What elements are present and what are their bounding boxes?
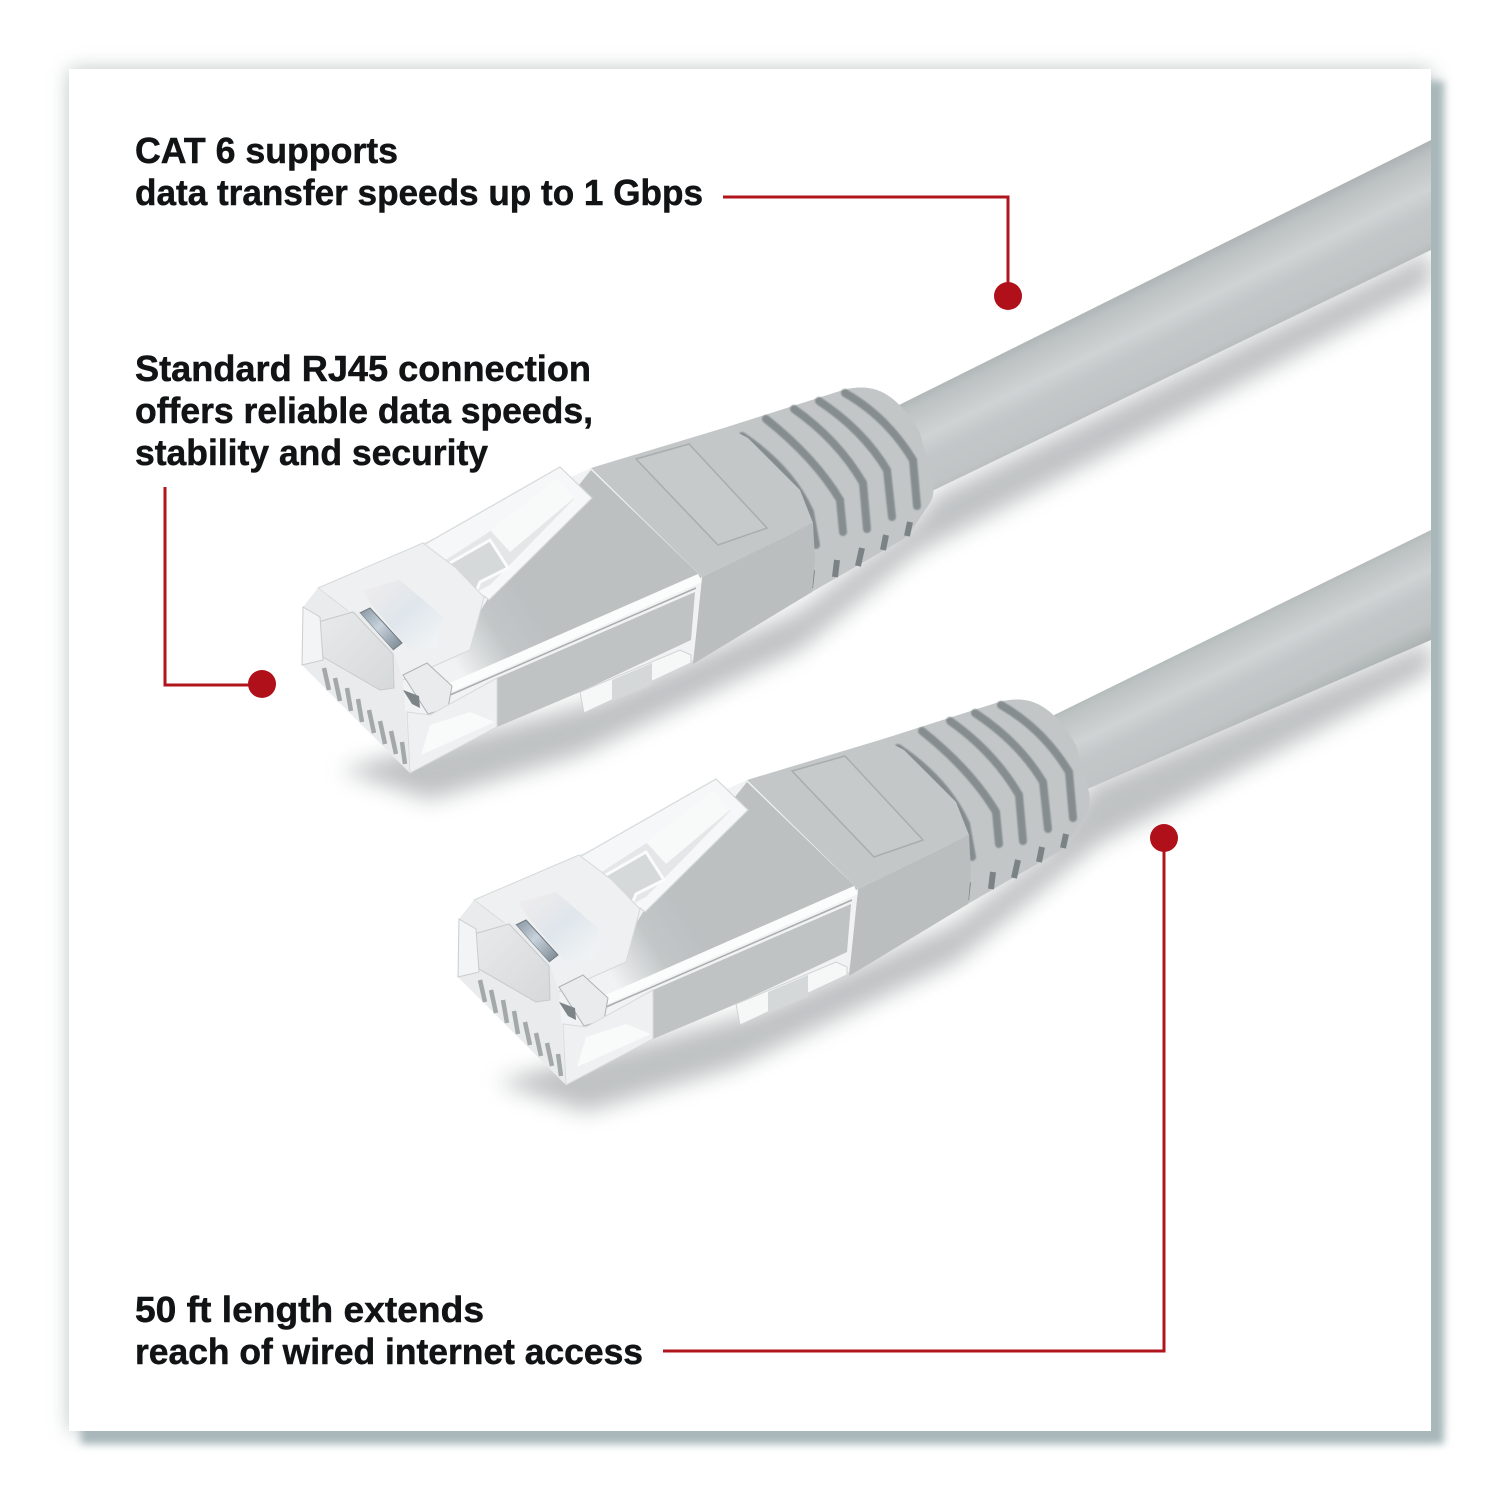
leader line <box>723 197 1008 296</box>
callout text: 50 ft length extends <box>135 1289 484 1330</box>
product photo: gray ethernet cable pair <box>302 140 1431 1112</box>
callout text <box>135 130 703 213</box>
callout text: stability and security <box>135 432 488 473</box>
callout text <box>135 1289 643 1372</box>
callout: data transfer speeds <box>135 130 1022 310</box>
callout text: CAT 6 supports <box>135 130 398 171</box>
callout text <box>135 348 593 473</box>
leader line <box>165 487 262 685</box>
callout: 50 ft length <box>135 824 1178 1372</box>
lower cable <box>1040 530 1431 790</box>
leader line <box>663 838 1164 1351</box>
callout: RJ45 connection <box>135 348 593 698</box>
marker dot <box>994 282 1022 310</box>
cable shadows <box>340 250 1431 1112</box>
lower RJ45 plug <box>458 700 1090 1085</box>
callout text: offers reliable data speeds, <box>135 390 593 431</box>
upper cable <box>885 140 1431 492</box>
callout text: reach of wired internet access <box>135 1331 643 1372</box>
callout text: Standard RJ45 connection <box>135 348 591 389</box>
upper RJ45 plug <box>302 388 934 773</box>
marker dot <box>248 670 276 698</box>
marker dot <box>1150 824 1178 852</box>
callout text: data transfer speeds up to 1 Gbps <box>135 172 703 213</box>
